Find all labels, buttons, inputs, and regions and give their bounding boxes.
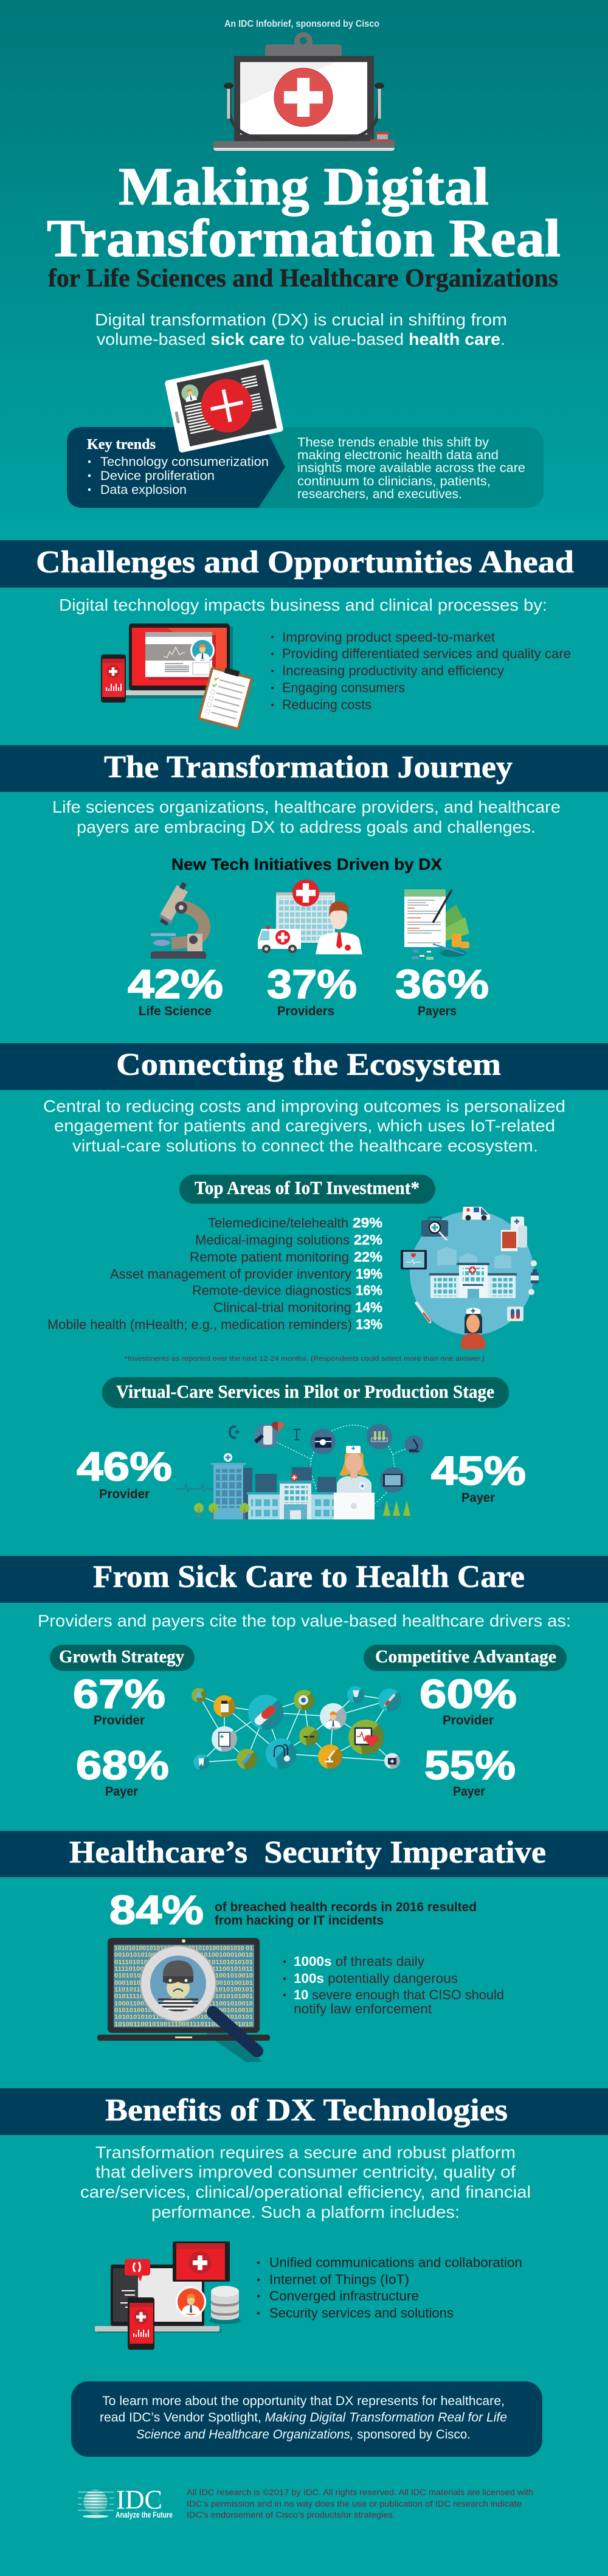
- section heading: Benefits of DX Technologies: [105, 2093, 508, 2128]
- legal text: IDC’s permission and in no way does the use or publication of IDC research indicate: [187, 2499, 522, 2508]
- callout: learn more: To learn more about the opportunity that DX represents for healthcare,: [102, 2394, 505, 2408]
- list: IoT investment areas: 22%: [354, 1232, 382, 1248]
- pill heading: top areas of IoT investment: [179, 1175, 435, 1204]
- benefits list: [271, 630, 571, 712]
- threat list: notify law enforcement: [294, 2001, 432, 2016]
- intro text: Providers and payers cite the top value-based healthcare drivers as:: [38, 1611, 571, 1630]
- stat: life science: 42%: [128, 962, 223, 1007]
- stat: competitive provider: Provider: [443, 1713, 494, 1727]
- stat: provider: 46%: [77, 1444, 172, 1490]
- sponsor line: An IDC Infobrief, sponsored by Cisco: [224, 19, 379, 29]
- stat: growth payer: Payer: [105, 1785, 138, 1799]
- list: IoT investment areas: Clinical-trial monitoring: [213, 1300, 351, 1315]
- benefits list: Increasing productivity and efficiency: [282, 663, 504, 678]
- trends explanation: insights more available across the care: [297, 461, 525, 475]
- pill heading: virtual-care services: Virtual-Care Services in Pilot or Production Stage: [116, 1381, 494, 1402]
- illustration: thief under magnifier on laptop: [97, 1938, 270, 2062]
- intro text: Digital technology impacts business and clinical processes by:: [59, 595, 547, 614]
- callout: learn more: Science and Healthcare Organizations, sponsored by Cisco.: [136, 2428, 471, 2442]
- icon: insurance form, money and medicine: [404, 889, 469, 960]
- intro text: care/services, clinical/operational efficiency, and financial: [80, 2182, 531, 2201]
- logo: IDC: Analyze the Future: [116, 2510, 173, 2519]
- intro text: [52, 797, 561, 836]
- platform list: Converged infrastructure: [269, 2288, 419, 2303]
- illustration: thief under magnifier on laptop: 1010101001010101011010010101001001010 01: [114, 1945, 253, 1952]
- illustration: thief under magnifier on laptop: 0001010100101010100101001010010100101: [114, 1979, 253, 1987]
- stat description: [215, 1900, 477, 1928]
- logo: IDC: IDC: [116, 2485, 162, 2515]
- illustration: thief under magnifier on laptop: 1101011101010110111010101101010100101: [114, 1986, 253, 1993]
- icon: tablet with medical cross: [164, 359, 284, 453]
- benefits list: Reducing costs: [282, 697, 371, 712]
- intro text: performance. Such a platform includes:: [151, 2203, 460, 2221]
- intro text: Digital transformation (DX) is crucial in shifting from: [95, 310, 507, 329]
- stat: competitive payer: Payer: [453, 1785, 485, 1799]
- stat: providers: Providers: [277, 1004, 334, 1018]
- list: IoT investment areas: 22%: [354, 1249, 382, 1265]
- stat: payers: 36%: [395, 962, 489, 1007]
- stat: payer: Payer: [461, 1491, 495, 1505]
- intro text: Transformation requires a secure and robust platform: [95, 2143, 516, 2162]
- stat: competitive payer: 55%: [424, 1743, 516, 1788]
- panel: from sick care to health care: [0, 1556, 608, 1799]
- illustration: thief under magnifier on laptop: 0101010010101010010100011101001010010: [114, 2007, 253, 2014]
- panel: benefits of DX technologies: [0, 2088, 608, 2519]
- icon: laptop, phone and clipboard: [101, 623, 254, 731]
- background top gradient: [0, 0, 608, 538]
- trends explanation: [297, 436, 525, 501]
- section heading: Challenges and Opportunities Ahead: [36, 545, 574, 580]
- key trends list: [88, 455, 269, 497]
- section heading: [0, 745, 608, 792]
- panel: security imperative: [0, 1831, 608, 2062]
- illustration: thief under magnifier on laptop: 1010011001010011100011101100110101010: [114, 2021, 253, 2028]
- threat list: 100s potentially dangerous: [294, 1971, 458, 1986]
- legal text: [187, 2487, 533, 2519]
- illustration: connected hospital circle: [401, 1207, 539, 1349]
- subtitle: for Life Sciences and Healthcare Organizations: [48, 265, 558, 293]
- trends explanation: continuum to clinicians, patients,: [297, 474, 491, 488]
- stat: payer: [431, 1448, 526, 1505]
- illustration: thief under magnifier on laptop: 0101111010101001010110101001010101001: [114, 1993, 253, 2000]
- trends explanation: researchers, and executives.: [297, 487, 462, 501]
- stat: competitive provider: [420, 1672, 517, 1727]
- panel: challenges and opportunities: [0, 540, 608, 731]
- panel: key trends box: [67, 359, 544, 508]
- intro text: volume-based sick care to value-based health care.: [97, 330, 505, 349]
- stat: provider: [77, 1444, 172, 1501]
- illustration: thief under magnifier on laptop: 1010101010111001011001010110101010101: [114, 2013, 253, 2021]
- list: IoT investment areas: Mobile health (mHealth; e.g., medication reminders): [47, 1317, 352, 1332]
- intro text: [95, 310, 507, 349]
- callout: learn more: read IDC’s Vendor Spotlight, Making Digital Transformation Real for Life: [100, 2411, 507, 2425]
- panel: hero: [47, 19, 561, 508]
- list: IoT investment areas: 16%: [356, 1282, 382, 1298]
- list: IoT investment areas: 14%: [355, 1299, 382, 1315]
- legal text: All IDC research is ©2017 by IDC. All rights reserved. All IDC materials are licensed with: [187, 2487, 533, 2497]
- stat: growth payer: 68%: [76, 1743, 169, 1788]
- intro text: that delivers improved consumer centricity, quality of: [95, 2162, 516, 2181]
- callout: learn more: [71, 2381, 542, 2457]
- stat: provider: Provider: [99, 1487, 150, 1501]
- key trends list: Technology consumerization: [100, 455, 269, 469]
- illustration: thief under magnifier on laptop: 1111010010101010111101010111100101011: [114, 1965, 253, 1973]
- stat: life science: Life Science: [139, 1004, 212, 1018]
- section heading: [0, 540, 608, 588]
- intro text: payers are embracing DX to address goals and challenges.: [77, 818, 536, 836]
- section heading: From Sick Care to Health Care: [93, 1560, 525, 1594]
- benefits list: Engaging consumers: [282, 680, 405, 695]
- platform list: Internet of Things (IoT): [269, 2272, 409, 2287]
- platform list: [257, 2255, 522, 2321]
- title: Transformation Real: [47, 209, 561, 268]
- icon: hospital, ambulance and doctor: [258, 880, 362, 954]
- legal text: IDC’s endorsement of Cisco’s products/or strategies.: [187, 2510, 395, 2519]
- chart heading: New Tech Initiatives Driven by DX: [171, 855, 442, 873]
- trends explanation: making electronic health data and: [297, 448, 499, 462]
- stat: payers: Payers: [418, 1004, 457, 1018]
- section heading: The Transformation Journey: [104, 750, 513, 785]
- logo: IDC: [78, 2485, 173, 2519]
- stat description: of breached health records in 2016 resulted: [215, 1900, 477, 1914]
- title: [47, 158, 561, 268]
- benefits list: Providing differentiated services and quality care: [282, 646, 571, 661]
- platform list: Security services and solutions: [269, 2305, 454, 2321]
- icon: laptop clipboard with stethoscope: [213, 32, 395, 151]
- stat: providers: 37%: [267, 962, 357, 1007]
- list: IoT investment areas: Asset management of provider inventory: [110, 1266, 351, 1282]
- key trends heading: Key trends: [87, 437, 156, 453]
- intro text: [80, 2143, 531, 2221]
- illustration: thief under magnifier on laptop: 0111010101010101000110100101101010101: [114, 1959, 253, 1966]
- list: IoT investment areas: 13%: [356, 1316, 382, 1332]
- list: IoT investment areas: [47, 1215, 382, 1332]
- threat list: 1000s of threats daily: [294, 1954, 424, 1969]
- illustration: thief under magnifier on laptop: 0101010101010101010111010111001010010: [114, 1972, 253, 1979]
- list: IoT investment areas: Telemedicine/telehealth: [208, 1215, 348, 1231]
- panel: connecting the ecosystem: [0, 1043, 608, 1519]
- list: IoT investment areas: 19%: [356, 1266, 382, 1282]
- stat: life science: [128, 962, 223, 1018]
- intro text: virtual-care solutions to connect the healthcare ecosystem.: [72, 1136, 538, 1155]
- section heading: [0, 1556, 608, 1603]
- icon: laptop, tablet, phone and database: [95, 2241, 241, 2350]
- illustration: virtual care city and nurse: [176, 1422, 423, 1519]
- intro text: [43, 1097, 565, 1155]
- diagram: healthcare icon network: [192, 1686, 401, 1770]
- pill heading: top areas of IoT investment: Top Areas of IoT Investment*: [195, 1177, 420, 1198]
- intro text: Life sciences organizations, healthcare providers, and healthcare: [52, 797, 561, 816]
- stat: payer: 45%: [431, 1448, 526, 1494]
- list: IoT investment areas: Remote-device diagnostics: [192, 1283, 351, 1298]
- platform list: Unified communications and collaboration: [269, 2255, 522, 2270]
- stat description: from hacking or IT incidents: [215, 1914, 384, 1928]
- trends explanation: These trends enable this shift by: [297, 436, 489, 450]
- stat: growth provider: Provider: [94, 1713, 145, 1727]
- section heading: [0, 1831, 608, 1877]
- stat: growth provider: 67%: [73, 1672, 165, 1717]
- key trends list: Data explosion: [100, 483, 187, 497]
- illustration: thief under magnifier on laptop: 0010101010001010100001110100100010010: [114, 1951, 253, 1959]
- icon: microscope: [151, 882, 206, 959]
- pill: growth strategy: [50, 1645, 195, 1671]
- panel: transformation journey: [0, 745, 608, 1018]
- key trends list: Device proliferation: [100, 469, 215, 483]
- title: Making Digital: [119, 158, 489, 217]
- list: IoT investment areas: Medical-imaging solutions: [195, 1232, 350, 1248]
- illustration: thief under magnifier on laptop: 1000110010010100010010000111001010010: [114, 2000, 253, 2007]
- benefits list: Improving product speed-to-market: [282, 630, 495, 645]
- pill: competitive advantage: Competitive Advantage: [375, 1647, 556, 1667]
- intro text: engagement for patients and caregivers, which uses IoT-related: [54, 1116, 555, 1135]
- pill heading: virtual-care services: [102, 1377, 509, 1408]
- intro text: Central to reducing costs and improving outcomes is personalized: [43, 1097, 565, 1116]
- threat list: 10 severe enough that CISO should: [294, 1987, 504, 2002]
- list: IoT investment areas: 29%: [353, 1215, 382, 1231]
- section heading: [0, 1043, 608, 1090]
- list: IoT investment areas: Remote patient monitoring: [190, 1249, 349, 1265]
- threat list: [283, 1954, 504, 2016]
- footnote: *Investments as reported over the next 12-24 months. (Respondents could select more than one answer.): [125, 1355, 485, 1363]
- section heading: Healthcare’s Security Imperative: [69, 1835, 546, 1870]
- stat: 84 percent: 84%: [109, 1887, 204, 1933]
- section heading: Connecting the Ecosystem: [116, 1047, 501, 1082]
- stat: competitive provider: 60%: [420, 1672, 517, 1717]
- pill: growth strategy: Growth Strategy: [59, 1647, 184, 1667]
- section heading: [0, 2088, 608, 2135]
- pill: competitive advantage: [364, 1645, 567, 1671]
